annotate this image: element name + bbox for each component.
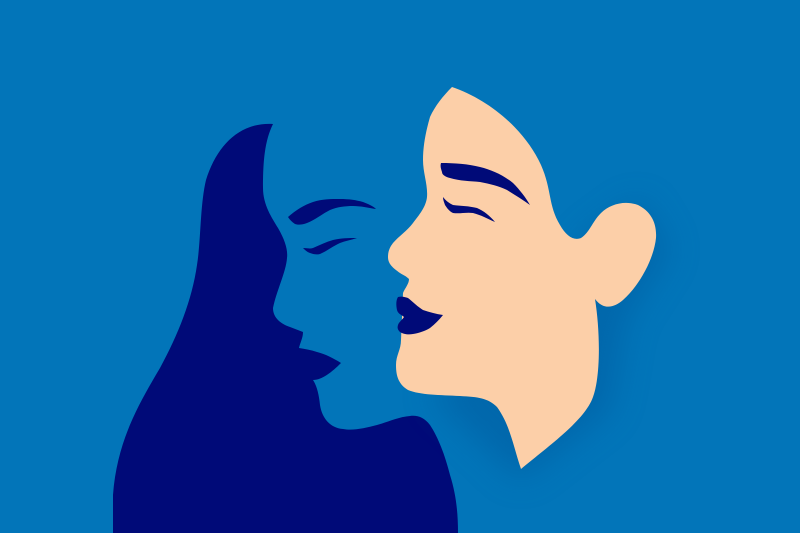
soft drop shadow of face <box>430 200 670 480</box>
lips <box>396 297 443 334</box>
eyebrow <box>441 163 530 205</box>
shadow silhouette: hair and profile <box>113 124 458 533</box>
closed eye <box>443 197 495 222</box>
shadow eyebrow <box>288 199 376 225</box>
shadow closed eye <box>303 238 357 254</box>
face and ear shape <box>388 87 656 469</box>
light face <box>388 87 656 469</box>
dark shadow profile <box>113 124 458 533</box>
